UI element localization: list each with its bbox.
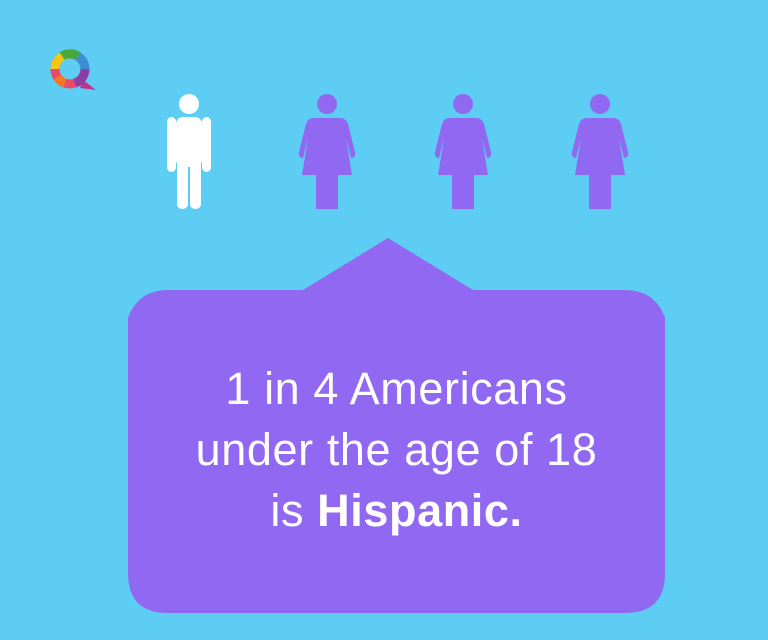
icon: woman 3 bbox=[572, 94, 628, 209]
callout text: is Hispanic. bbox=[270, 485, 523, 536]
callout text bbox=[196, 363, 597, 536]
icon: woman 1 bbox=[299, 94, 355, 209]
speech bubble bbox=[128, 238, 665, 613]
callout text: 1 in 4 Americans bbox=[225, 363, 568, 414]
icon: logo bbox=[55, 54, 96, 90]
callout text: under the age of 18 bbox=[196, 424, 597, 475]
icon: woman 2 bbox=[435, 94, 491, 209]
icon: man bbox=[167, 94, 211, 209]
